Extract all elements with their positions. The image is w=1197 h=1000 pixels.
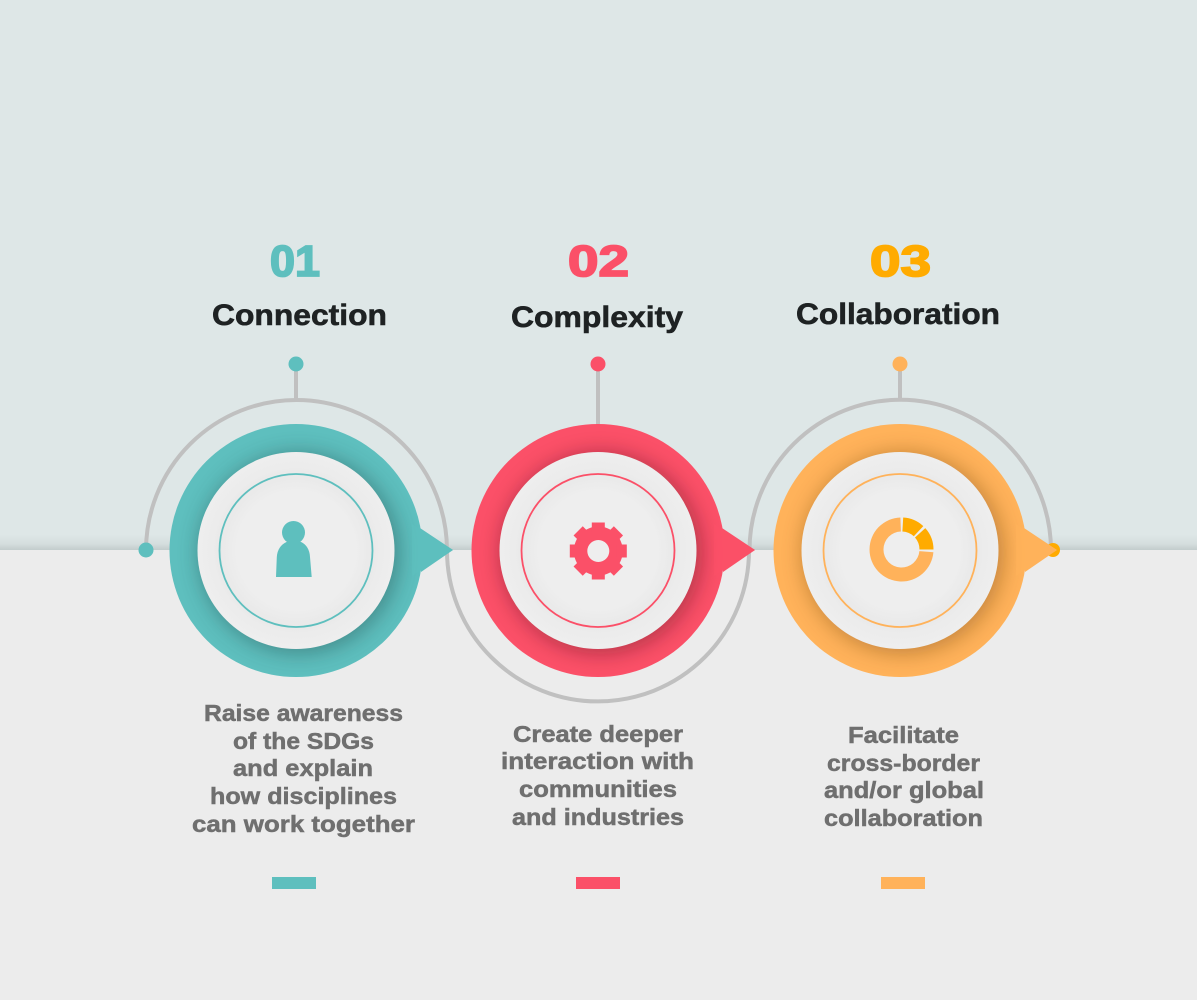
step 2 description: and industries [512,804,684,830]
step 1 description: can work together [192,811,415,837]
step 1 start dot [138,542,154,558]
step 2 description: Create deeper [513,721,683,747]
step 1 number: 01 [270,237,320,286]
step 3 description [824,722,984,831]
step 2 bar [576,877,620,889]
step 1 description: of the SDGs [233,728,374,754]
connector arcs [146,364,1051,701]
icon: donut chart [870,518,934,581]
step 1 description [192,700,415,837]
icon: gear [570,522,627,580]
step 3 description: cross-border [827,750,980,776]
step 3 pin dot [892,356,908,372]
step 2 description: interaction with [501,748,694,774]
step 3 number: 03 [870,237,931,286]
step 3 end dot [1046,543,1060,557]
background: lower panel [0,550,1197,1000]
step 1 pin dot [288,356,304,372]
step 1 title: Connection [212,299,387,332]
step 3 bar [881,877,925,889]
step 2 number: 02 [568,237,629,286]
icon: person [276,521,312,577]
step 2 description [501,721,694,830]
step 3 description: Facilitate [848,722,959,748]
step 3 description: collaboration [824,805,983,831]
step 3 description: and/or global [824,777,984,803]
step 2 pin dot [590,356,606,372]
step 2 description: communities [519,776,677,802]
background: upper panel [0,0,1197,550]
step 2 badge [472,424,755,677]
step 3 title: Collaboration [796,298,1000,331]
step 3 badge [774,424,1057,677]
step 1 badge [170,424,453,677]
step 1 description: Raise awareness [204,700,403,726]
step 2 title: Complexity [511,301,683,334]
step 1 description: how disciplines [210,783,397,809]
step 1 bar [272,877,316,889]
step 1 description: and explain [233,755,373,781]
